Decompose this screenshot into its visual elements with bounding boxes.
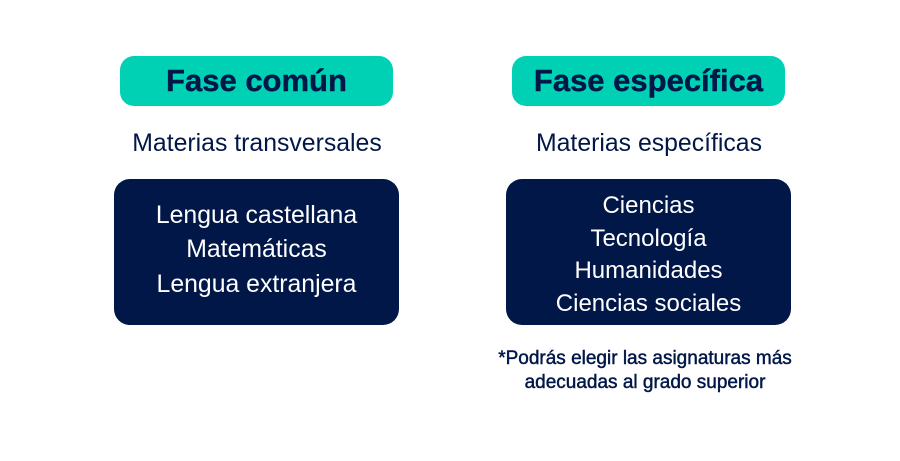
footnote (498, 348, 792, 393)
heading: Fase común (120, 56, 393, 106)
heading: Fase específica (512, 56, 785, 106)
panel: specific subjects: Tecnología (590, 225, 707, 252)
heading: Fase específica: Fase específica (534, 63, 763, 98)
footnote: *Podrás elegir las asignaturas más (498, 348, 792, 369)
panel: specific subjects: Ciencias (602, 192, 695, 219)
subheading: Materias específicas: Materias específicas (536, 130, 762, 157)
panel: common subjects: Lengua extranjera (157, 271, 356, 298)
panel: specific subjects: Humanidades (574, 257, 723, 284)
panel: common subjects (114, 179, 399, 325)
footnote: adecuadas al grado superior (525, 372, 765, 393)
subheading: Materias transversales: Materias transversales (132, 130, 382, 157)
panel: common subjects: Lengua castellana (156, 202, 357, 229)
panel: common subjects: Matemáticas (186, 236, 327, 263)
panel: specific subjects (506, 179, 791, 325)
panel: specific subjects: Ciencias sociales (556, 290, 741, 317)
heading: Fase común: Fase común (166, 63, 347, 98)
